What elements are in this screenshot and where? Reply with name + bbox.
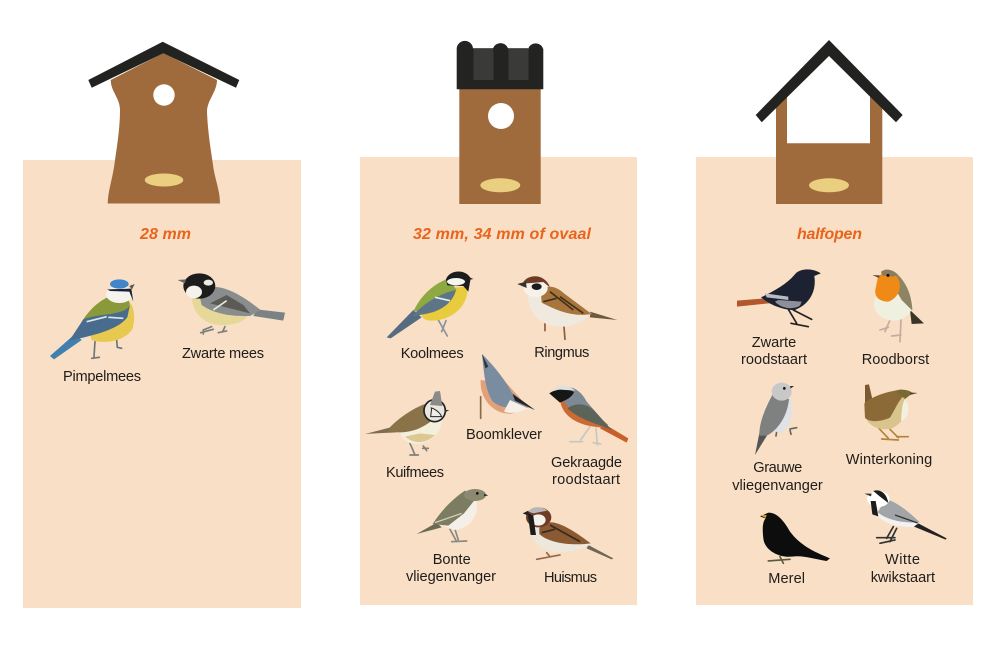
bird: Bonte vliegenvanger <box>417 489 488 542</box>
label: Boomklever: Boomklever <box>466 427 542 443</box>
bird: Gekraagde roodstaart <box>549 386 628 445</box>
label: Witte kwikstaart <box>871 552 935 586</box>
bird: Pimpelmees <box>50 279 135 359</box>
label: Zwarte roodstaart: Zwarte <box>752 335 796 351</box>
label: Pimpelmees: Pimpelmees <box>63 369 141 385</box>
bird: Boomklever <box>481 354 535 418</box>
label: Gekraagde roodstaart: roodstaart <box>552 472 620 488</box>
label: Witte kwikstaart: kwikstaart <box>871 570 935 586</box>
heading: 28 mm: 28 mm <box>139 226 191 243</box>
heading: 32 mm, 34 mm of ovaal: 32 mm, 34 mm of ovaal <box>413 226 592 243</box>
bird: Koolmees <box>387 271 473 338</box>
label: Zwarte roodstaart: roodstaart <box>741 352 807 368</box>
label: Bonte vliegenvanger <box>406 552 496 585</box>
panel: 32 mm, 34 mm of ovaal <box>360 41 637 605</box>
label: Witte kwikstaart: Witte <box>885 552 920 568</box>
label: Ringmus: Ringmus <box>534 345 589 361</box>
label: Winterkoning: Winterkoning <box>846 452 932 468</box>
label: Merel: Merel <box>768 571 805 587</box>
label: Grauwe vliegenvanger <box>732 460 823 494</box>
icon: half-open birdhouse <box>756 40 903 204</box>
label: Grauwe vliegenvanger: vliegenvanger <box>732 478 823 494</box>
bird: Zwarte mees <box>178 273 285 334</box>
label: Grauwe vliegenvanger: Grauwe <box>753 460 802 476</box>
bird: Winterkoning <box>864 384 918 440</box>
label: Huismus: Huismus <box>544 570 597 586</box>
bird: Ringmus <box>517 276 617 339</box>
bird: Grauwe vliegenvanger <box>755 383 797 455</box>
bird: Roodborst <box>872 270 924 342</box>
heading: halfopen: halfopen <box>797 226 862 243</box>
label: Bonte vliegenvanger: Bonte <box>433 552 471 568</box>
label: Gekraagde roodstaart: Gekraagde <box>551 455 622 471</box>
panel: halfopen <box>696 40 973 605</box>
label: Bonte vliegenvanger: vliegenvanger <box>406 569 496 585</box>
label: Kuifmees: Kuifmees <box>386 465 444 481</box>
bird: Merel <box>760 513 830 563</box>
icon: birdhouse with curved body <box>88 42 239 204</box>
label: Zwarte mees: Zwarte mees <box>182 346 264 362</box>
label: Roodborst: Roodborst <box>862 352 929 368</box>
bird: Huismus <box>523 507 613 559</box>
bird: Zwarte roodstaart <box>737 269 821 327</box>
label: Zwarte roodstaart <box>741 335 807 368</box>
label: Koolmees: Koolmees <box>401 346 464 362</box>
bird: Witte kwikstaart <box>864 490 947 543</box>
panel: 28 mm <box>23 42 301 608</box>
label: Gekraagde roodstaart <box>551 455 622 488</box>
icon: birdhouse with battlement roof <box>457 41 543 204</box>
bird: Kuifmees <box>365 391 449 455</box>
